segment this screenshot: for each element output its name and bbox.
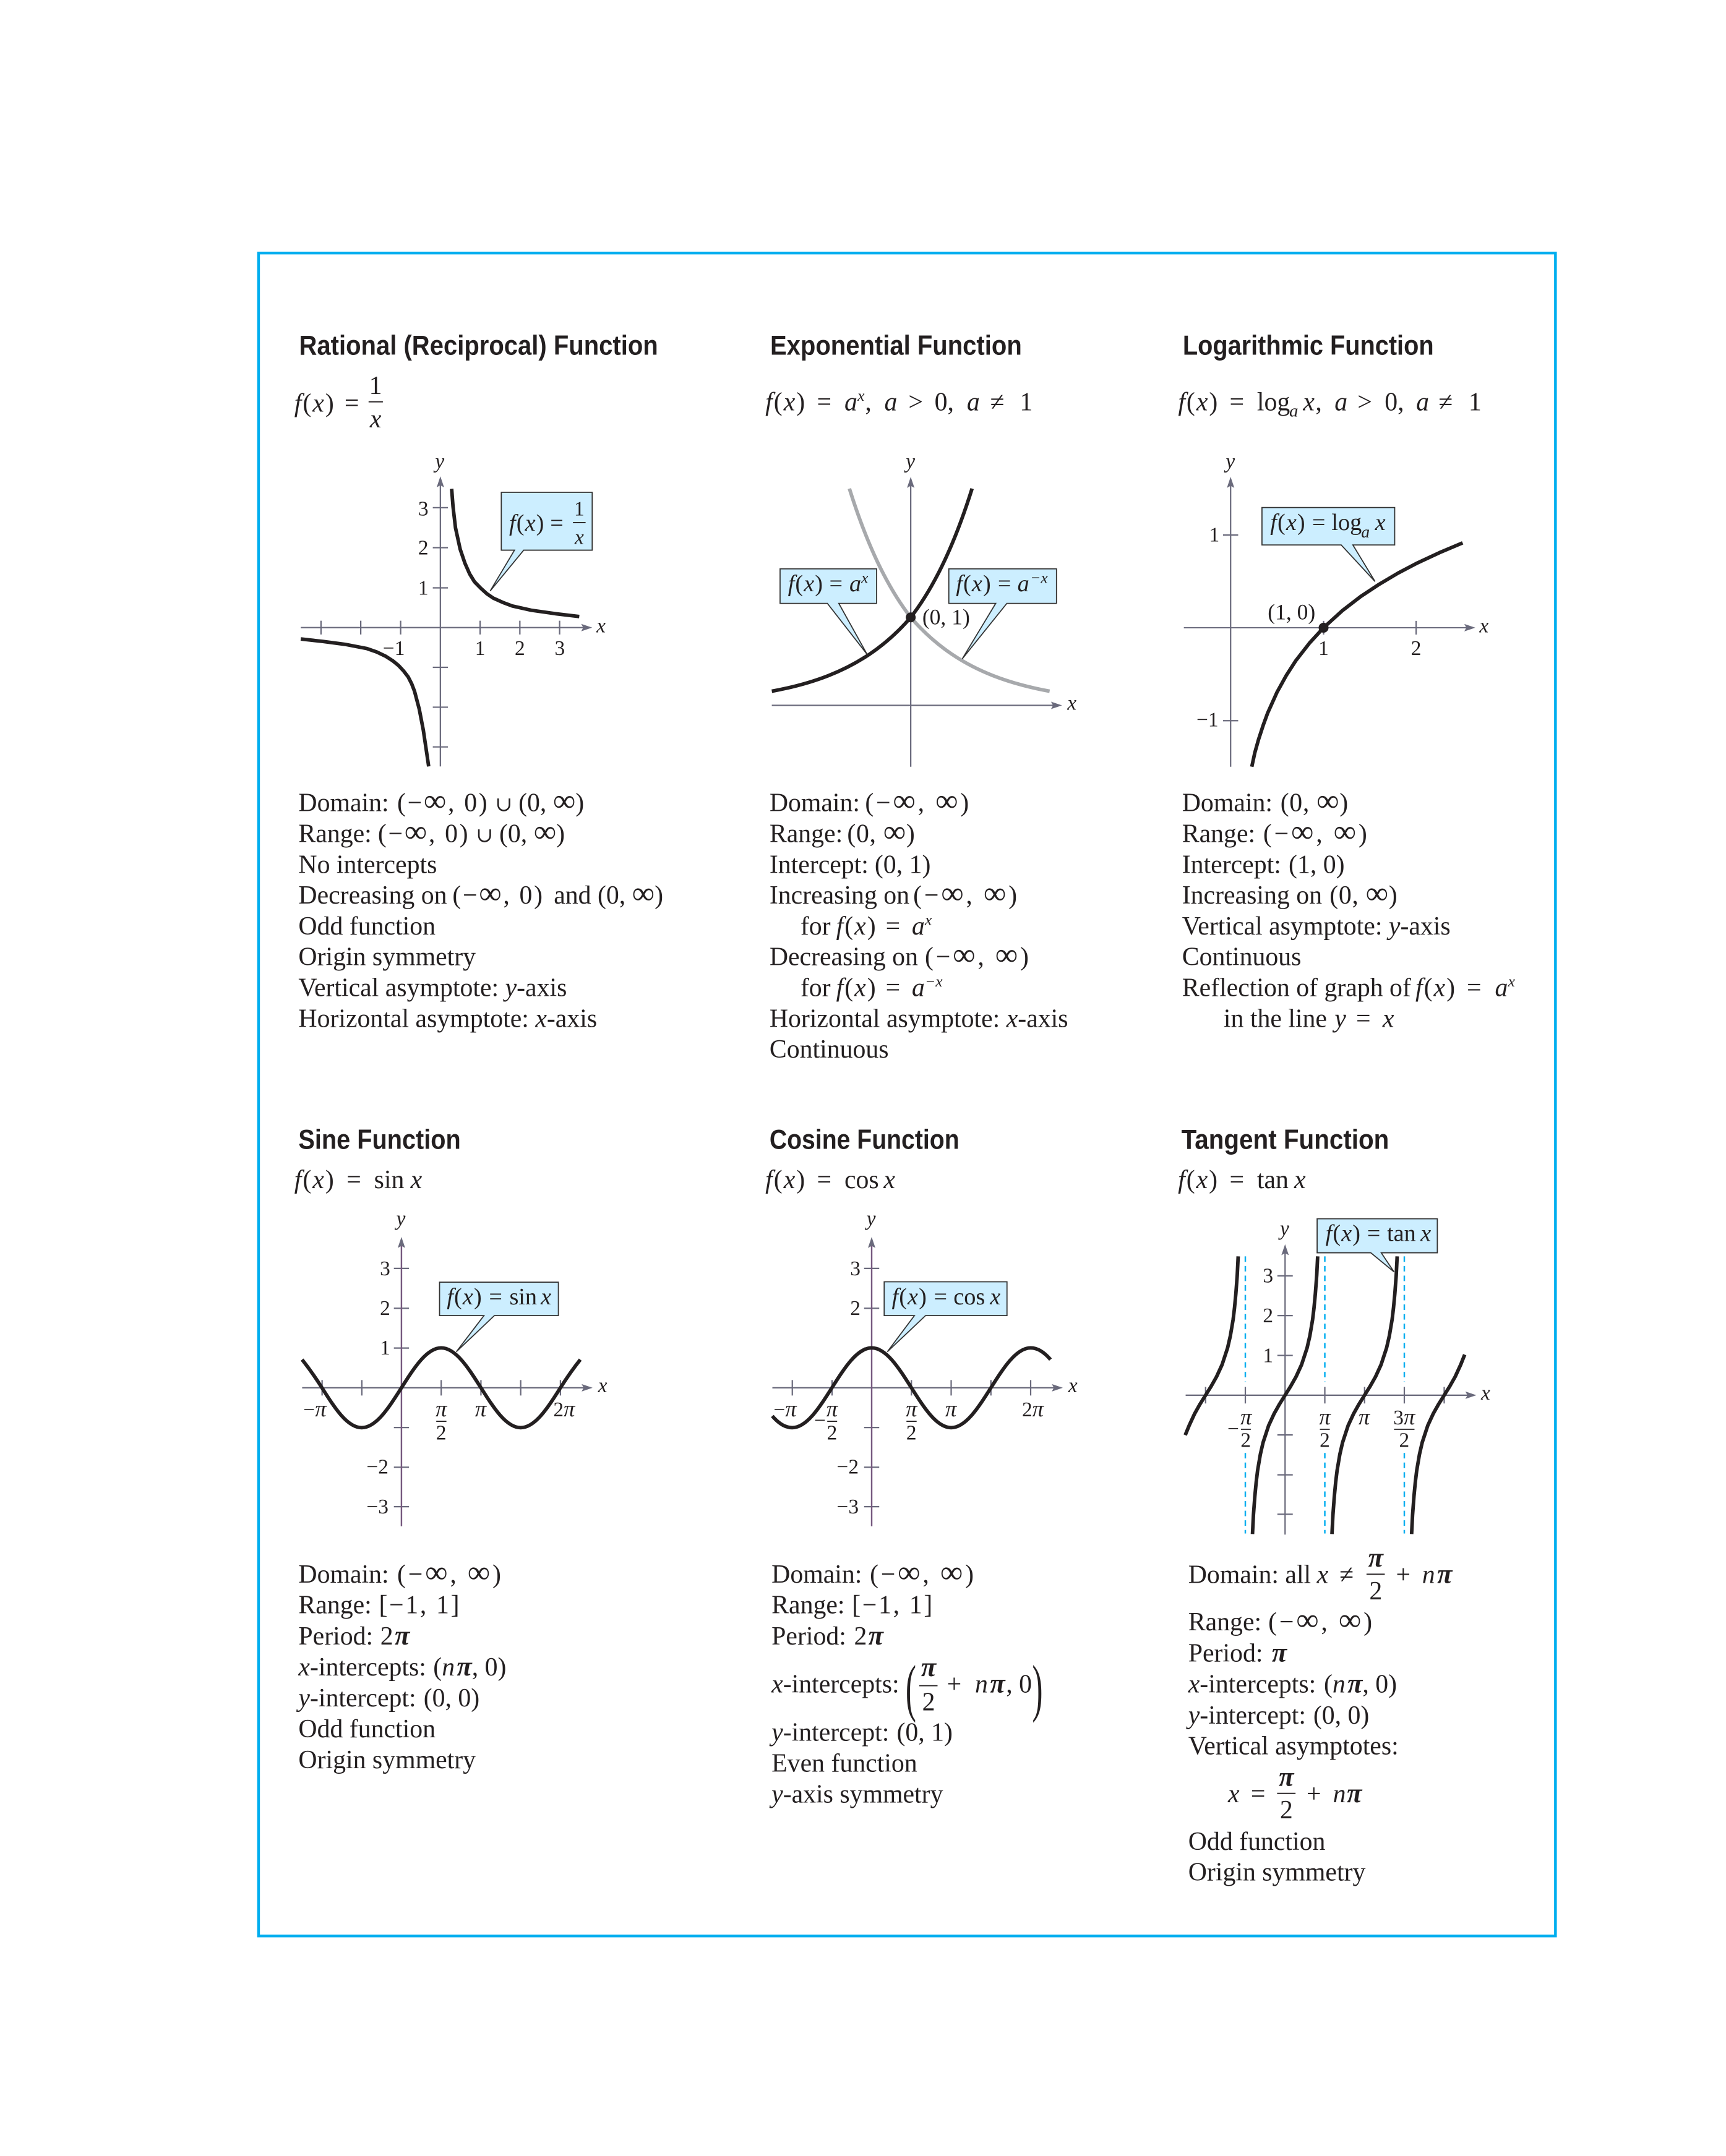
properties: tangent function: =	[1251, 1780, 1265, 1808]
properties: tangent function: Period:	[1188, 1639, 1263, 1667]
properties: logarithmic function: (0, ∞)	[1329, 876, 1398, 911]
properties: logarithmic function: x	[1508, 972, 1516, 990]
chart: cosine graph: −3	[837, 1495, 859, 1518]
properties: exponential function: f(x)	[836, 912, 877, 941]
callout: f(x)=cos x: f(x)	[891, 1284, 927, 1310]
properties: tangent function: x-intercepts:	[1188, 1670, 1316, 1698]
properties: cosine function: x-intercepts:	[771, 1670, 899, 1699]
properties: tangent function: π	[1437, 1559, 1453, 1589]
chart: cosine graph: π	[945, 1396, 958, 1421]
properties: cosine function: Range:	[771, 1591, 845, 1620]
properties: tangent function: (−∞, ∞)	[1268, 1602, 1375, 1638]
properties: rational function: No intercepts	[298, 850, 437, 879]
properties: tangent function: π	[1272, 1636, 1288, 1667]
properties: exponential function: =	[886, 912, 900, 941]
properties: cosine function: n	[975, 1670, 988, 1699]
properties: rational function: Origin symmetry	[298, 943, 476, 972]
properties: exponential function: (0, 1)	[875, 850, 930, 879]
properties: cosine function: )	[1032, 1654, 1042, 1723]
chart: cosine graph: π	[906, 1396, 918, 1421]
chart: reciprocal graph: 2	[515, 637, 525, 660]
properties: tangent function	[1186, 1542, 1453, 1886]
formula: f(x)=1/x: 1	[369, 372, 382, 400]
chart: tangent graph: π	[1359, 1404, 1371, 1429]
properties: logarithmic function: in the line	[1224, 1004, 1327, 1033]
chart: reciprocal graph: x	[596, 615, 606, 638]
chart: exponential graphs: (0, 1)	[922, 604, 970, 629]
chart: tangent graph: 2	[1240, 1429, 1251, 1452]
properties: cosine function: (0, 1)	[896, 1719, 953, 1747]
callout: f(x)=1/x: f(x)	[509, 510, 544, 536]
chart: cosine graph: 2π	[1022, 1396, 1045, 1421]
chart: cosine graph: 2	[850, 1297, 861, 1320]
formula: f(x)=a^x: ≠	[990, 388, 1005, 417]
properties: exponential function: Range:	[770, 820, 843, 849]
callout: f(x)=cos x	[884, 1281, 1007, 1352]
chart: sine graph: y	[395, 1207, 406, 1230]
properties: exponential function: Domain:	[770, 789, 860, 818]
heading: cosine function: Cosine Function	[770, 1124, 960, 1155]
properties: rational function: Range:	[298, 820, 372, 849]
properties: logarithmic function: Increasing on	[1182, 881, 1322, 910]
heading: sine function: Sine Function	[298, 1124, 461, 1155]
formula: f(x)=log_a x: ≠	[1438, 388, 1453, 417]
chart: sine graph: 2	[436, 1421, 447, 1444]
formula: f(x)=a^x: a	[967, 388, 980, 417]
properties: tangent function: 2	[1280, 1796, 1293, 1824]
properties: rational function: (0, ∞)	[499, 815, 565, 850]
properties: rational function: (−∞, 0)	[378, 815, 470, 850]
callout: f(x)=sin x: sin	[509, 1284, 537, 1310]
chart: logarithm graph: −1	[1196, 708, 1219, 731]
chart: sine graph: π	[436, 1396, 448, 1421]
chart: logarithm graph: y	[1224, 450, 1235, 473]
formula: f(x)=cos x: cos	[844, 1166, 879, 1194]
callout: f(x)=log_a x: x	[1375, 510, 1386, 536]
chart: cosine graph: −2	[837, 1456, 859, 1479]
properties: logarithmic function	[1182, 784, 1516, 1033]
chart: reciprocal graph: 3	[418, 497, 429, 520]
callout: f(x)=1/x	[490, 492, 592, 591]
formula: f(x)=a^x: =	[817, 388, 831, 417]
callout: f(x)=cos x: x	[989, 1284, 1000, 1310]
properties: rational function: (−∞, 0)	[397, 784, 489, 819]
callout: f(x)=a^-x: =	[998, 571, 1011, 597]
callout: f(x)=tan x: x	[1420, 1220, 1431, 1246]
formula: f(x)=a^x: f(x)	[765, 388, 806, 417]
properties: cosine function: Even function	[771, 1749, 917, 1777]
properties: sine function: (nπ, 0)	[433, 1651, 506, 1682]
chart: tangent graph: x	[1480, 1382, 1490, 1405]
properties: cosine function: Period:	[771, 1622, 846, 1651]
callout: f(x)=sin x: =	[489, 1284, 502, 1310]
chart: tangent graph: −	[1227, 1418, 1239, 1440]
chart: cosine graph: −π	[773, 1396, 797, 1421]
callout: f(x)=log_a x	[1262, 508, 1394, 581]
formula: f(x)=log_a x: x	[1302, 388, 1315, 417]
formula: f(x)=sin x: =	[346, 1166, 361, 1194]
properties: logarithmic function: (1, 0)	[1289, 850, 1345, 879]
properties: logarithmic function: Reflection of graph of	[1182, 974, 1411, 1003]
heading: tangent function: Tangent Function	[1182, 1124, 1389, 1155]
properties: tangent function: Origin symmetry	[1188, 1858, 1366, 1886]
chart: cosine graph: 2	[906, 1421, 917, 1444]
properties: exponential function: Continuous	[770, 1035, 889, 1064]
properties: sine function: (−∞, ∞)	[397, 1555, 504, 1590]
chart: tangent graph: 3	[1263, 1265, 1273, 1288]
properties: tangent function: Odd function	[1188, 1828, 1326, 1856]
chart: cosine graph: 3	[850, 1257, 861, 1280]
properties: cosine function	[769, 1555, 1042, 1809]
properties: logarithmic function: (−∞, ∞)	[1263, 815, 1370, 850]
formula: f(x)=log_a x: =	[1229, 388, 1244, 417]
callout: f(x)=1/x: x	[574, 526, 584, 549]
formula: f(x)=a^x: ,	[865, 388, 872, 417]
callout: f(x)=log_a x: log	[1331, 510, 1362, 536]
chart: logarithm graph: 1	[1209, 523, 1219, 546]
properties: exponential function: for	[801, 974, 831, 1003]
callout: f(x)=sin x	[440, 1282, 559, 1352]
chart: logarithm graph: 2	[1411, 637, 1421, 660]
properties: sine function: π	[395, 1620, 411, 1651]
properties: exponential function: Horizontal asymptote: x-axis	[770, 1004, 1068, 1033]
chart: tangent graph: 2	[1399, 1429, 1409, 1452]
properties: sine function: y-intercept:	[298, 1684, 416, 1713]
chart: sine graph: 3	[380, 1257, 390, 1280]
properties: exponential function: (−∞, ∞)	[925, 938, 1031, 973]
properties: cosine function: 2	[854, 1622, 867, 1651]
properties: cosine function: , 0	[1006, 1670, 1032, 1699]
chart: reciprocal graph: 3	[554, 637, 565, 660]
chart: logarithm graph: 1	[1318, 637, 1329, 660]
chart: sine graph: 1	[380, 1337, 390, 1359]
properties: tangent function: π	[1347, 1777, 1363, 1808]
panel: rational function	[294, 331, 663, 1033]
properties: tangent function: ≠	[1339, 1561, 1354, 1589]
chart: sine graph: 2	[380, 1297, 390, 1320]
panel: logarithmic function	[1178, 331, 1516, 1033]
properties: rational function	[298, 784, 663, 1033]
chart: cosine graph: y	[865, 1207, 876, 1230]
formula: f(x)=log_a x: >	[1357, 388, 1372, 417]
properties: exponential function: (−∞, ∞)	[913, 876, 1020, 911]
panel: tangent function	[1178, 1124, 1490, 1886]
properties: sine function: Period:	[298, 1622, 373, 1651]
formula: f(x)=log_a x: 0,	[1385, 388, 1404, 417]
properties: tangent function: n	[1333, 1780, 1346, 1808]
properties: tangent function: +	[1396, 1561, 1410, 1589]
chart: cosine graph: π	[827, 1396, 839, 1421]
properties: rational function: (0, ∞)	[518, 784, 584, 819]
properties: tangent function: (0, 0)	[1313, 1701, 1369, 1730]
callout: f(x)=a^-x: −x	[1030, 569, 1048, 587]
properties: exponential function	[770, 784, 1068, 1064]
properties: rational function: and	[554, 881, 591, 910]
callout: f(x)=a^-x	[949, 569, 1057, 659]
callout: f(x)=a^x: f(x)	[788, 571, 823, 597]
properties: exponential function: x	[924, 910, 932, 928]
callout: f(x)=sin x: x	[540, 1284, 551, 1310]
properties: rational function: Odd function	[298, 912, 436, 941]
properties: sine function: Odd function	[298, 1715, 436, 1743]
chart: reciprocal graph: y	[433, 450, 444, 473]
properties: rational function: Horizontal asymptote: x-axis	[298, 1004, 597, 1033]
properties: rational function: ∪	[495, 794, 512, 816]
callout: f(x)=a^-x: f(x)	[956, 571, 992, 597]
properties: sine function: Domain:	[298, 1560, 389, 1589]
formula: f(x)=cos x: f(x)	[765, 1166, 806, 1194]
heading: logarithmic function: Logarithmic Function	[1183, 331, 1434, 361]
chart: cosine graph	[772, 1207, 1078, 1526]
formula: f(x)=a^x: a	[884, 388, 897, 417]
formula: f(x)=log_a x: f(x)	[1178, 388, 1219, 417]
properties: cosine function: π	[990, 1668, 1006, 1699]
chart: logarithm graph	[1184, 450, 1488, 767]
properties: tangent function: x	[1227, 1780, 1240, 1808]
properties: logarithmic function: y	[1332, 1004, 1346, 1033]
formula: f(x)=sin x: f(x)	[294, 1166, 335, 1194]
properties: exponential function: Increasing on	[770, 881, 909, 910]
properties: exponential function: a	[912, 912, 925, 941]
chart: tangent graph	[1185, 1218, 1490, 1534]
chart: exponential graphs: y	[904, 450, 915, 473]
properties: sine function	[296, 1555, 506, 1774]
callout: f(x)=a^x: =	[830, 571, 843, 597]
callout: f(x)=sin x: f(x)	[447, 1284, 483, 1310]
formula: f(x)=1/x: =	[345, 390, 359, 418]
properties: logarithmic function: Range:	[1182, 820, 1255, 849]
properties: logarithmic function: Vertical asymptote: y-axis	[1182, 912, 1451, 941]
properties: sine function: 2	[380, 1622, 393, 1651]
formula: f(x)=1/x	[294, 372, 383, 434]
callout: f(x)=cos x: =	[934, 1284, 947, 1310]
properties: logarithmic function: =	[1356, 1004, 1371, 1033]
formula: f(x)=a^x: >	[908, 388, 923, 417]
properties: exponential function: −x	[925, 972, 943, 990]
properties: exponential function: Decreasing on	[770, 943, 918, 972]
chart: sine graph: −2	[366, 1456, 389, 1479]
properties: sine function: Range:	[298, 1591, 372, 1620]
properties: cosine function: [−1, 1]	[852, 1591, 934, 1620]
callout: f(x)=log_a x: a	[1361, 523, 1370, 542]
formula: f(x)=sin x: x	[410, 1166, 423, 1194]
chart: tangent graph: 2	[1263, 1304, 1273, 1327]
properties: tangent function: n	[1422, 1561, 1435, 1589]
properties: sine function: (0, 0)	[424, 1684, 479, 1713]
properties: logarithmic function: Intercept:	[1182, 850, 1281, 879]
formula: f(x)=log_a x: a	[1334, 388, 1347, 417]
chart: tangent graph: π	[1240, 1404, 1253, 1429]
properties: rational function: ∪	[476, 824, 493, 847]
callout: f(x)=log_a x: f(x)	[1270, 510, 1306, 536]
chart: sine graph	[302, 1207, 608, 1526]
properties: logarithmic function: a	[1495, 974, 1508, 1003]
formula: f(x)=cos x: x	[883, 1166, 895, 1194]
formula: f(x)=log_a x: ,	[1315, 388, 1322, 417]
properties: exponential function: f(x)	[836, 974, 877, 1003]
callout: f(x)=a^x: x	[861, 569, 869, 587]
formula: f(x)=1/x: f(x)	[294, 390, 335, 418]
properties: rational function: (0, ∞)	[598, 876, 663, 911]
heading: exponential function: Exponential Function	[770, 331, 1022, 361]
properties: rational function: Domain:	[298, 789, 389, 818]
properties: tangent function: (nπ, 0)	[1324, 1667, 1397, 1698]
callout: f(x)=tan x: tan	[1387, 1220, 1416, 1246]
properties: sine function: Origin symmetry	[298, 1746, 476, 1774]
properties: exponential function: Intercept:	[770, 850, 869, 879]
properties: exponential function: =	[886, 974, 900, 1003]
formula: f(x)=cos x: =	[817, 1166, 831, 1194]
formula: f(x)=log_a x: 1	[1469, 388, 1482, 417]
formula: f(x)=log_a x: a	[1289, 401, 1298, 421]
properties: tangent function: π	[1368, 1542, 1385, 1573]
callout: f(x)=tan x	[1317, 1219, 1437, 1272]
properties: tangent function: 2	[1369, 1577, 1382, 1606]
formula: f(x)=tan x: =	[1229, 1166, 1244, 1194]
properties: rational function: Decreasing on	[298, 881, 447, 910]
properties: tangent function: π	[1279, 1761, 1295, 1792]
callout: f(x)=1/x: =	[550, 510, 564, 536]
properties: cosine function: y-axis symmetry	[769, 1781, 943, 1809]
chart: exponential graphs	[772, 450, 1076, 767]
properties: tangent function: Vertical asymptotes:	[1188, 1732, 1399, 1761]
formula: f(x)=a^x: a	[844, 388, 857, 417]
formula: f(x)=1/x: x	[369, 405, 382, 434]
callout: f(x)=log_a x: =	[1312, 510, 1325, 536]
chart: reciprocal graph	[301, 450, 606, 766]
properties: exponential function: (0, ∞)	[847, 815, 916, 850]
properties: rational function: Vertical asymptote: y-axis	[298, 974, 567, 1003]
properties: tangent function: y-intercept:	[1188, 1701, 1306, 1730]
chart: reciprocal graph: 1	[475, 637, 485, 660]
callout: f(x)=a^x: a	[849, 571, 861, 597]
chart: tangent graph: π	[1319, 1404, 1331, 1429]
formula: f(x)=a^x: 1	[1020, 388, 1033, 417]
callout: f(x)=1/x: 1	[574, 498, 585, 521]
formula: f(x)=a^x: 0,	[935, 388, 954, 417]
properties: cosine function: y-intercept:	[771, 1719, 889, 1747]
callout: f(x)=a^-x: a	[1018, 571, 1029, 597]
properties: tangent function: Domain: all	[1188, 1561, 1311, 1589]
chart: reciprocal graph: 2	[418, 537, 429, 560]
chart: reciprocal graph: −1	[383, 637, 405, 660]
formula: f(x)=tan x: x	[1294, 1166, 1306, 1194]
properties: tangent function: +	[1307, 1780, 1321, 1808]
properties: cosine function: π	[869, 1620, 885, 1651]
chart: tangent graph: 2	[1320, 1429, 1330, 1452]
properties: cosine function: π	[921, 1651, 937, 1682]
chart: sine graph: x	[598, 1374, 608, 1397]
formula: f(x)=tan x: f(x)	[1178, 1166, 1219, 1194]
chart: cosine graph: −	[814, 1410, 826, 1432]
properties: cosine function: Domain:	[771, 1560, 862, 1589]
properties: cosine function: (	[906, 1654, 916, 1723]
chart: tangent graph: 3π	[1393, 1404, 1416, 1429]
chart: cosine graph: x	[1068, 1374, 1078, 1397]
panel: exponential function	[765, 331, 1076, 1064]
chart: sine graph: π	[475, 1396, 487, 1421]
callout: f(x)=cos x: cos	[953, 1284, 985, 1310]
properties: exponential function: (−∞, ∞)	[865, 784, 971, 819]
properties: exponential function: for	[801, 912, 831, 941]
chart: sine graph: −π	[303, 1396, 327, 1421]
properties: cosine function: (−∞, ∞)	[870, 1555, 976, 1590]
chart: logarithm graph: (1, 0)	[1268, 599, 1315, 624]
properties: exponential function: a	[912, 974, 925, 1003]
chart: reciprocal graph: 1	[418, 576, 429, 599]
callout: f(x)=a^x	[780, 569, 877, 654]
heading: rational function: Rational (Reciprocal) Function	[299, 331, 658, 361]
formula: f(x)=a^x: x	[857, 387, 865, 404]
properties: logarithmic function: x	[1382, 1004, 1394, 1033]
properties: rational function: (−∞, 0)	[452, 876, 544, 911]
callout: f(x)=tan x: f(x)	[1326, 1220, 1361, 1246]
chart: tangent graph: y	[1278, 1218, 1289, 1241]
properties: logarithmic function: =	[1467, 974, 1482, 1003]
properties: cosine function: 2	[922, 1688, 935, 1717]
properties: logarithmic function: Domain:	[1182, 789, 1273, 818]
properties: logarithmic function: f(x)	[1415, 974, 1456, 1003]
properties: tangent function: Range:	[1188, 1608, 1261, 1636]
panel: sine function	[294, 1124, 608, 1774]
chart: cosine graph: 2	[827, 1421, 837, 1444]
properties: cosine function: +	[947, 1670, 961, 1699]
panel: cosine function	[765, 1124, 1078, 1809]
properties: sine function: [−1, 1]	[379, 1591, 461, 1620]
callout: f(x)=tan x: =	[1367, 1220, 1380, 1246]
properties: logarithmic function: Continuous	[1182, 943, 1301, 972]
formula: f(x)=log_a x: log	[1257, 388, 1290, 417]
chart: sine graph: 2π	[553, 1396, 576, 1421]
properties: logarithmic function: (0, ∞)	[1281, 784, 1349, 819]
formula: f(x)=sin x: sin	[374, 1166, 405, 1194]
formula: f(x)=log_a x: a	[1416, 388, 1429, 417]
properties: tangent function: x	[1316, 1561, 1329, 1589]
properties: sine function: x-intercepts:	[298, 1653, 426, 1682]
chart: sine graph: −3	[366, 1495, 389, 1518]
formula: f(x)=tan x: tan	[1257, 1166, 1289, 1194]
chart: exponential graphs: x	[1067, 692, 1076, 715]
chart: logarithm graph: x	[1479, 615, 1488, 638]
panel frame	[259, 253, 1555, 1936]
chart: tangent graph: 1	[1263, 1344, 1273, 1367]
